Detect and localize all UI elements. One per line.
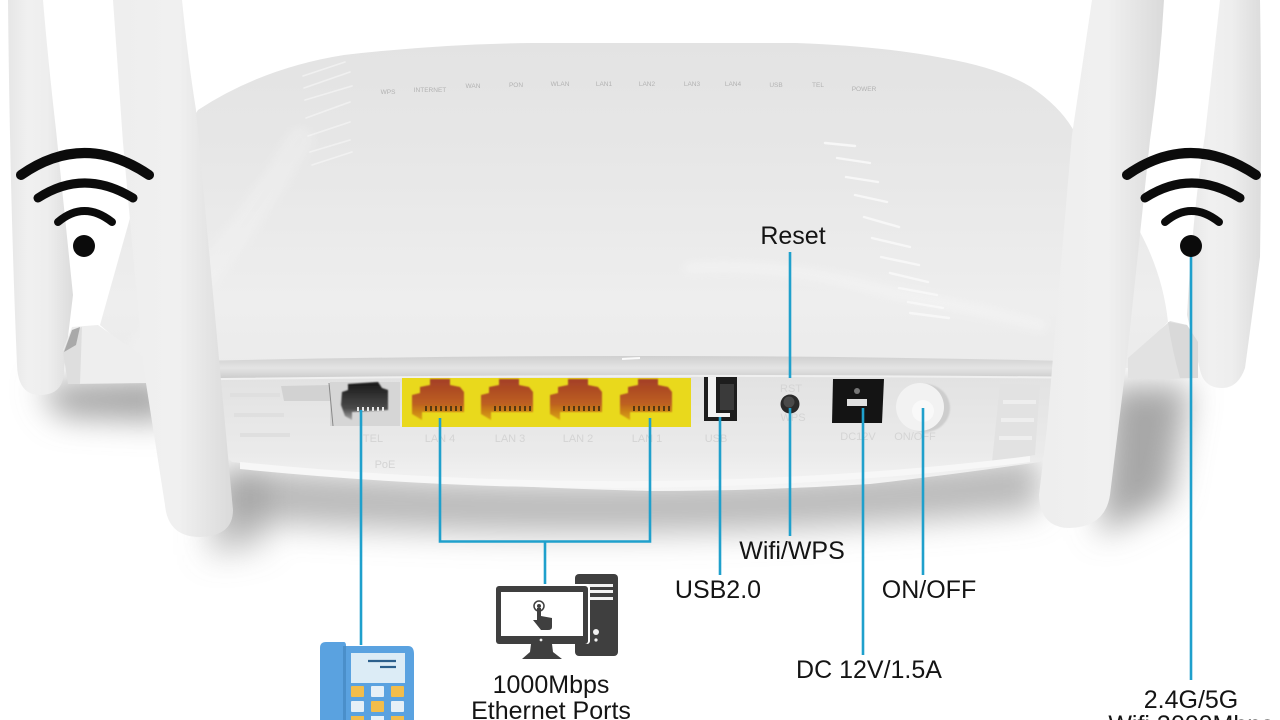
icon: left wifi signal: [21, 153, 149, 257]
printed port labels: [363, 383, 936, 471]
printed port labels: TEL: [363, 433, 383, 445]
top cover ribbing highlights: [140, 62, 1040, 350]
printed port labels: USB: [705, 433, 727, 445]
icon: telephone: [320, 642, 414, 720]
label: 2.4G/5G Wifi: 2.4G/5G: [1144, 686, 1238, 714]
printed port labels: PoE: [375, 459, 395, 471]
rear panel of router: [150, 356, 1105, 491]
top panel LED labels: LAN2: [639, 81, 656, 88]
LAN port pins: [426, 406, 669, 411]
monitor: [494, 584, 590, 659]
right antenna hinge: [1128, 321, 1198, 379]
left antenna hinge: [63, 325, 150, 384]
top panel LED labels: INTERNET: [414, 87, 446, 94]
icon: desktop computer: [494, 574, 618, 659]
top panel LED labels: WAN: [466, 83, 481, 90]
front right antenna: [1039, 0, 1164, 528]
connector line: Wifi/WPS: [789, 408, 791, 536]
connector line: antenna: [1190, 252, 1192, 680]
printed port labels: LAN 2: [563, 433, 593, 445]
LAN port 3: [481, 379, 533, 420]
top panel LED labels: POWER: [852, 86, 877, 93]
label: USB2.0: USB2.0: [675, 576, 761, 604]
label: DC 12V/1.5A: DC 12V/1.5A: [796, 656, 942, 684]
reset button: [780, 394, 800, 414]
label: ON/OFF: ON/OFF: [882, 576, 976, 604]
router top cover: [100, 43, 1168, 368]
front left antenna: [113, 0, 233, 537]
connector line: telephone: [360, 410, 362, 645]
top panel LED labels: WLAN: [551, 81, 570, 88]
printed port labels: ON/OFF: [894, 431, 936, 443]
power button: [896, 383, 950, 432]
LAN port 1: [620, 379, 672, 420]
top panel LED labels: LAN1: [596, 81, 613, 88]
top panel LED labels: TEL: [812, 82, 824, 89]
printed port labels: LAN 1: [632, 433, 662, 445]
icon: right wifi signal: [1127, 153, 1256, 257]
top panel LED labels: USB: [769, 82, 783, 89]
touch hand: [533, 601, 552, 630]
top panel LED labels: PON: [509, 82, 523, 89]
LAN port 4: [412, 379, 464, 420]
printed port labels: DC12V: [840, 431, 876, 443]
top panel LED labels: WPS: [381, 89, 396, 96]
LAN port 2: [550, 379, 602, 420]
printed port labels: WPS: [780, 412, 806, 424]
top panel LED labels: [381, 81, 877, 96]
DC power jack: [832, 379, 884, 423]
printed port labels: LAN 4: [425, 433, 455, 445]
top panel LED labels: LAN4: [725, 81, 742, 88]
computer tower: [575, 574, 618, 656]
connector line: ON/OFF: [922, 408, 924, 575]
connector line: DC power: [862, 408, 864, 655]
connector bracket: ethernet ports: [440, 418, 650, 585]
label: Wifi/WPS: Wifi/WPS: [739, 537, 845, 565]
rear left antenna: [8, 0, 73, 395]
label: 1000Mbps Ethernet Ports: 1000Mbps: [493, 671, 609, 699]
connector line: USB: [719, 417, 721, 575]
LAN ports yellow block: [402, 378, 691, 427]
USB port: [704, 377, 737, 421]
rear right antenna: [1187, 0, 1261, 388]
printed port labels: RST: [780, 383, 802, 395]
label: Reset: Reset: [760, 222, 826, 250]
printed port labels: LAN 3: [495, 433, 525, 445]
router shadow: [40, 380, 1190, 555]
telephone port: [329, 382, 400, 426]
top panel LED labels: LAN3: [684, 81, 701, 88]
connector line: reset top: [789, 252, 791, 378]
